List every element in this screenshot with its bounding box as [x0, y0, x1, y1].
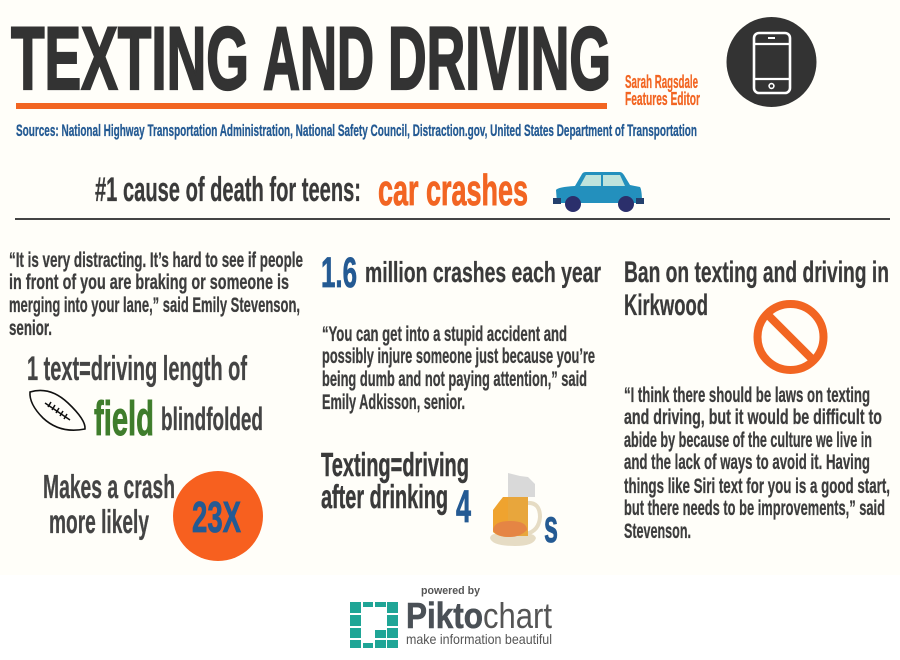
headline: leading cause of death: car crashes	[378, 166, 528, 215]
icon: car	[553, 172, 644, 212]
stat: 23X more likely	[43, 468, 263, 561]
right column	[624, 256, 890, 543]
heading: ban in Kirkwood: Kirkwood	[624, 289, 708, 322]
orange title rule	[16, 103, 607, 109]
byline: Features Editor	[625, 89, 700, 109]
quote: Stevenson: Stevenson.	[624, 520, 691, 543]
quote: Stevenson	[624, 384, 890, 543]
title: TEXTING	[11, 8, 249, 108]
icon: Piktochart logo	[350, 602, 398, 648]
quote: Emily Adkisson	[322, 323, 595, 414]
quote: Emily Stevenson	[9, 249, 303, 340]
stat: 23X more likely: Makes a crash	[43, 468, 175, 505]
quote: Emily Adkisson: “You can get into a stupid accident and	[322, 323, 567, 346]
quote: Emily Stevenson: in front of you are braking or someone is	[9, 271, 289, 294]
stat: driving after drinking 4 beers: s	[544, 500, 558, 552]
footer: Piktochart branding: Pikto	[406, 595, 483, 636]
stat: 1.6 million crashes: million crashes each year	[365, 257, 601, 289]
divider line	[15, 218, 890, 220]
icon: football	[30, 390, 85, 430]
stat: driving length of a field: field	[94, 393, 154, 446]
headline: leading cause of death: #1 cause of death for teens:	[95, 171, 361, 209]
stat: driving length of a field: blindfolded	[161, 401, 263, 437]
title: DRIVING	[388, 8, 611, 108]
icon: prohibition sign	[758, 304, 824, 370]
quote: Emily Adkisson: possibly injure someone just because you’re	[322, 345, 595, 368]
stat: driving after drinking 4 beers: 4	[456, 481, 471, 532]
stat: driving after drinking 4 beers	[321, 446, 558, 552]
quote: Emily Stevenson: senior.	[9, 317, 52, 340]
footer: Piktochart branding: chart	[483, 595, 552, 636]
icon: beer mug	[490, 473, 540, 546]
stat: driving length of a field: 1 text=driving length of	[27, 350, 247, 388]
left column	[9, 249, 303, 561]
stat: 23X more likely: more likely	[49, 503, 149, 540]
middle column	[321, 249, 601, 552]
footer: Piktochart branding: make information beautiful	[406, 631, 552, 647]
quote: Emily Adkisson: Emily Adkisson, senior.	[322, 391, 465, 414]
stat: driving after drinking 4 beers: Texting=driving	[321, 446, 469, 483]
stat: driving after drinking 4 beers: after drinking	[321, 478, 448, 515]
title: AND	[263, 8, 374, 108]
footer: Piktochart branding: powered by	[421, 585, 481, 597]
quote: Emily Stevenson: “It is very distracting. It’s hard to see if people	[9, 249, 303, 272]
quote: Emily Stevenson: merging into your lane,” said Emily Stevenson,	[9, 294, 300, 317]
title	[11, 8, 611, 108]
byline	[625, 72, 700, 109]
icon: smartphone	[726, 17, 816, 107]
heading: ban in Kirkwood	[624, 256, 889, 322]
footer: Piktochart branding	[350, 585, 552, 648]
stat: 1.6 million crashes	[321, 249, 601, 297]
byline: Sarah Ragsdale	[625, 72, 698, 92]
quote: Emily Adkisson: being dumb and not paying attention,” said	[322, 368, 587, 391]
stat: 1.6 million crashes: 1.6	[321, 249, 357, 297]
stat: 23X more likely: 23X	[192, 493, 241, 542]
stat: driving length of a field	[27, 350, 263, 446]
header	[11, 8, 816, 140]
